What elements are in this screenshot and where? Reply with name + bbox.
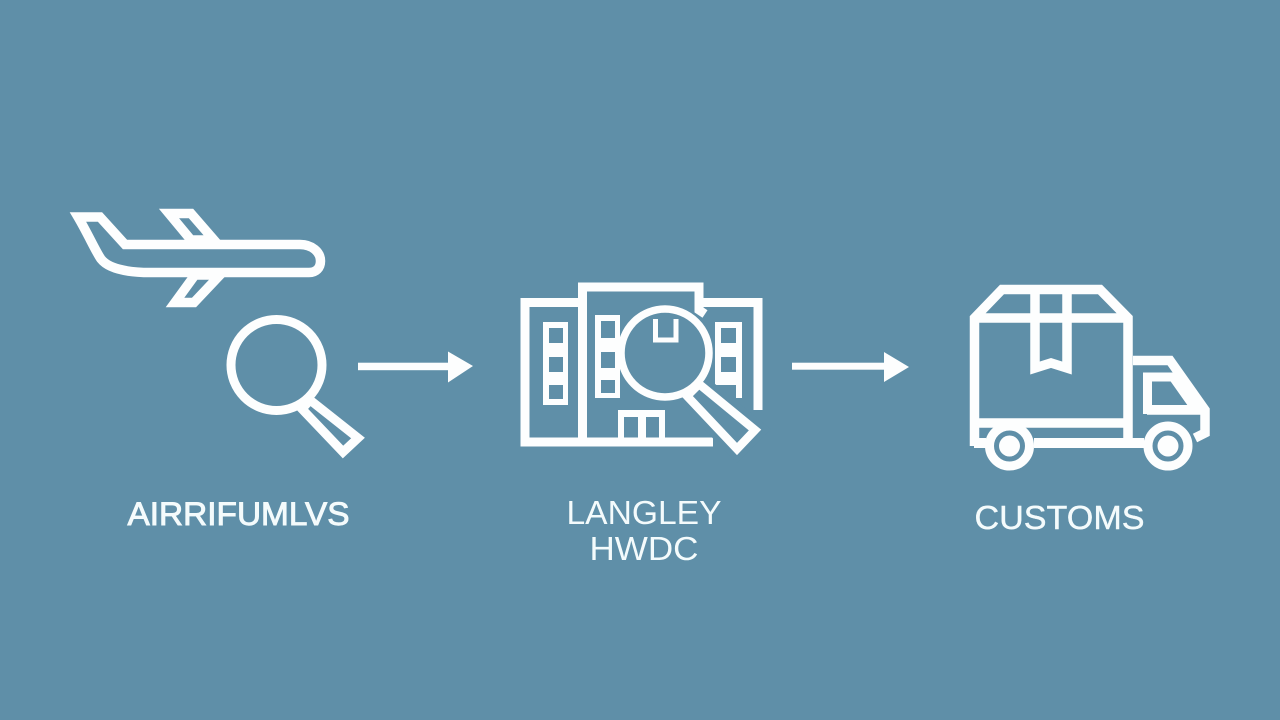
parcel tape (1035, 292, 1067, 368)
building windows (543, 315, 742, 440)
parcel box (974, 290, 1128, 446)
magnifier lens (621, 309, 709, 397)
label: Langley HWDC: LANGLEY (566, 494, 722, 531)
rear wheel (990, 426, 1030, 466)
truck cab (1133, 360, 1205, 438)
package mark in lens (656, 319, 676, 340)
magnifier handle (686, 383, 756, 449)
icon: building under magnifying glass (525, 287, 758, 449)
front wheel (1148, 426, 1188, 466)
arrow: Langley to customs (792, 352, 909, 382)
label: Langley HWDC (566, 494, 722, 567)
icon: airplane (78, 214, 320, 302)
building outline (525, 287, 758, 442)
label: Langley HWDC: HWDC (590, 530, 698, 567)
label: customs: CUSTOMS (974, 499, 1144, 536)
label: airfreight: AIRRIFUMLVS (128, 496, 350, 532)
arrow: airfreight to Langley (358, 352, 473, 382)
icon: delivery truck with parcel (974, 290, 1205, 466)
chassis (974, 438, 1144, 448)
icon: magnifying glass (231, 320, 358, 452)
